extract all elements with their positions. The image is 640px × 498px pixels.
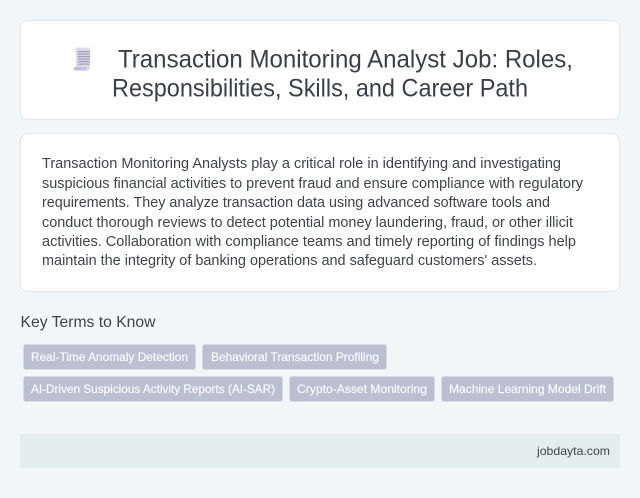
tag labels: Behavioral Transaction Profiling	[211, 350, 379, 364]
tag labels: Machine Learning Model Drift	[449, 382, 607, 396]
title	[112, 46, 573, 102]
tag: machine learning model drift	[441, 376, 614, 402]
panel: title card	[20, 20, 620, 120]
tag labels: AI-Driven Suspicious Activity Reports (AI-SAR)	[31, 382, 275, 396]
description text: maintain the integrity of banking operations and safeguard customers' assets.	[42, 253, 537, 269]
tag: AI-SAR	[23, 376, 283, 402]
footer brand: jobdayta.com	[536, 444, 610, 458]
description text: activities. Collaboration with compliance teams and timely reporting of findings help	[42, 234, 576, 250]
tag labels: Real-Time Anomaly Detection	[31, 350, 188, 364]
description text: Transaction Monitoring Analysts play a critical role in identifying and investigating	[42, 156, 561, 172]
tag: behavioral transaction profiling	[202, 344, 387, 370]
title: Transaction Monitoring Analyst Job: Roles,	[118, 46, 573, 74]
footer bar	[20, 434, 620, 468]
tag: real-time anomaly detection	[23, 344, 196, 370]
description text	[42, 156, 584, 269]
heading: key terms: Key Terms to Know	[20, 314, 156, 331]
title: Responsibilities, Skills, and Career Path	[112, 74, 528, 102]
tag labels: Crypto-Asset Monitoring	[297, 382, 427, 396]
description text: suspicious financial activities to prevent fraud and ensure compliance with regulatory	[42, 176, 584, 192]
tag: crypto-asset monitoring	[289, 376, 435, 402]
description text: requirements. They analyze transaction data using advanced software tools and	[42, 195, 550, 211]
panel: description card	[20, 133, 620, 292]
icon: document receipt	[74, 47, 90, 70]
description text: conduct thorough reviews to detect potential money laundering, fraud, or other illicit	[42, 215, 573, 231]
